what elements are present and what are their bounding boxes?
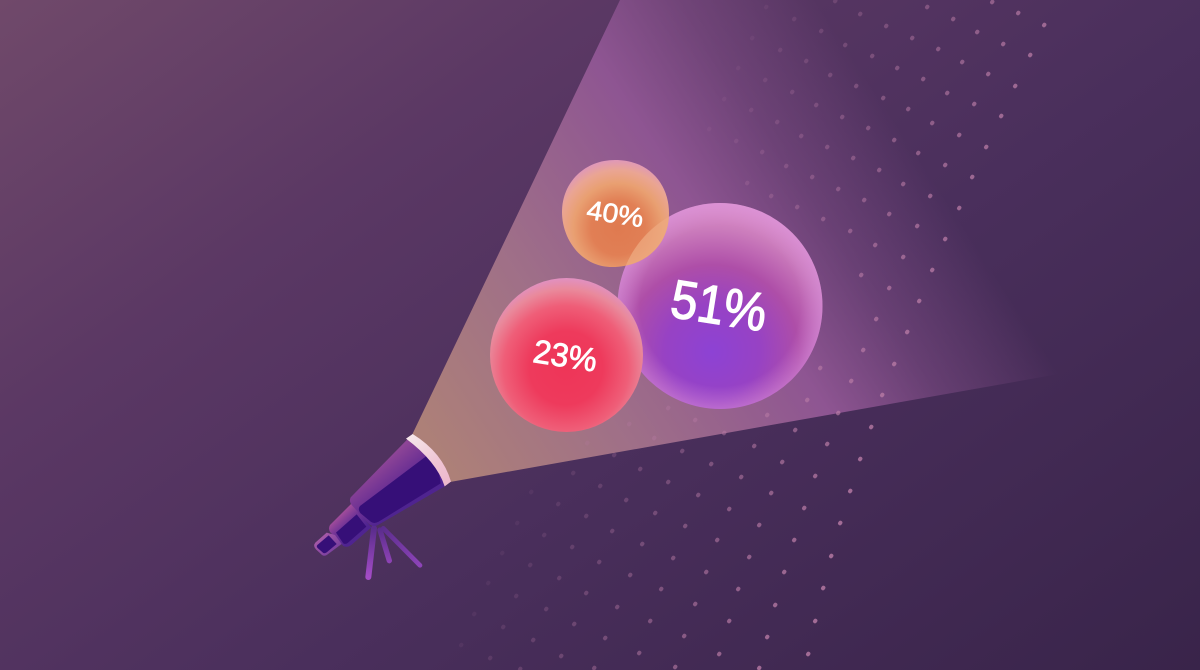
telescope middle tube <box>329 503 371 547</box>
bubble: 51%: 51% <box>667 269 771 343</box>
dot field <box>461 1 1044 669</box>
telescope legs <box>368 528 420 577</box>
telescope front ring <box>406 434 451 486</box>
icon: telescope <box>314 434 451 577</box>
telescope eyepiece <box>314 533 342 556</box>
bubble: 40%: 40% <box>585 195 646 233</box>
light beam <box>412 0 1200 482</box>
telescope main tube <box>350 438 446 526</box>
bubble: 23% <box>490 278 643 432</box>
bubble: 40% <box>562 160 669 267</box>
bubble: 51% <box>618 203 822 409</box>
bubble: 23%: 23% <box>531 332 600 379</box>
